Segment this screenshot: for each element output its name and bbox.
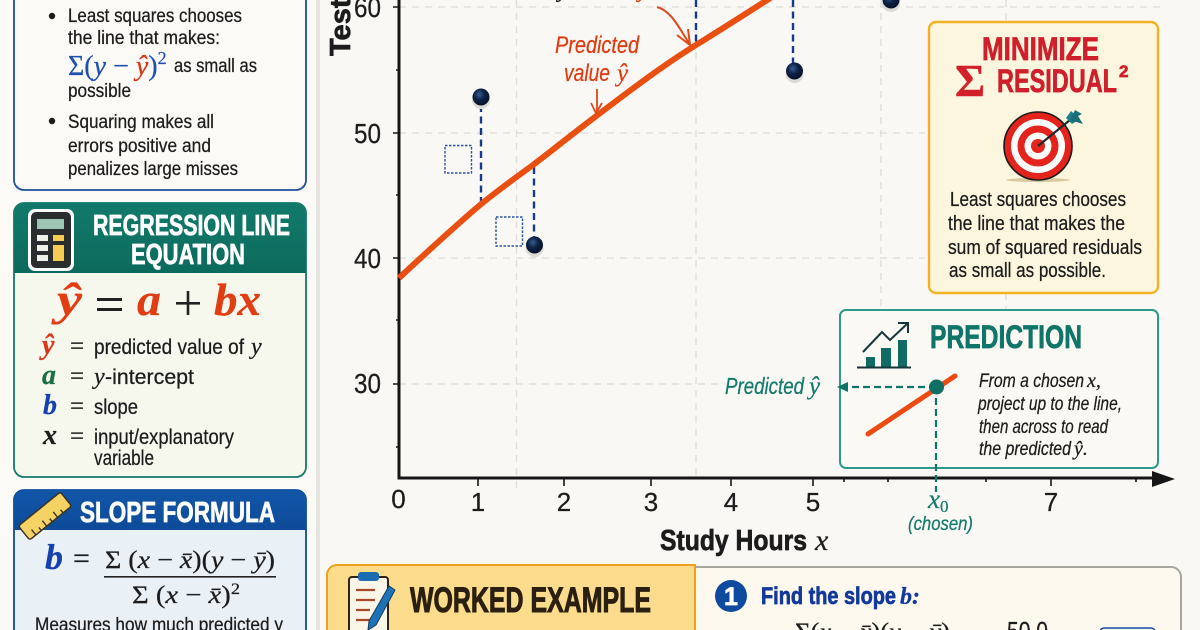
legend of symbols: predicted value of <box>94 336 244 359</box>
panel header <box>327 565 695 630</box>
heading: SLOPE FORMULA <box>80 497 275 529</box>
annotation: predicted value: ŷ <box>614 60 629 87</box>
text: Least squares chooses <box>950 189 1126 211</box>
x axis labels: 5 <box>806 487 820 517</box>
y axis labels: 30 <box>354 368 381 399</box>
y axis labels <box>354 0 381 399</box>
text: then across to read <box>979 417 1109 438</box>
heading: Σ <box>955 55 985 106</box>
text: ŷ. <box>1072 438 1088 460</box>
bullet: least squares chooses the line: 2 <box>158 48 167 68</box>
x0 label <box>908 484 973 535</box>
x axis labels: 4 <box>724 487 738 517</box>
panel: regression line equation <box>14 203 306 477</box>
heading: MINIMIZE <box>982 31 1099 67</box>
heading: RESIDUAL <box>997 63 1117 99</box>
legend of symbols: y <box>249 334 262 360</box>
legend of symbols: slope <box>94 396 138 419</box>
text: the predicted <box>979 439 1072 460</box>
predicted label: Predicted <box>725 373 805 399</box>
step 1: b: <box>900 584 920 610</box>
heading <box>955 31 1128 106</box>
annotation: arrow to line <box>556 0 690 45</box>
residual squares <box>445 146 522 246</box>
bullet: squaring: Squaring makes all <box>68 112 214 133</box>
legend of symbols: variable <box>94 447 154 470</box>
formula: 2 <box>231 581 240 598</box>
heading <box>93 210 290 271</box>
text <box>977 370 1122 460</box>
y axis labels: 40 <box>354 243 381 274</box>
equation <box>51 274 261 325</box>
legend of symbols: y <box>92 364 105 390</box>
formula: = <box>73 542 90 575</box>
text: sum of squared residuals <box>948 237 1142 259</box>
bullet: least squares chooses the line: possible <box>68 81 131 102</box>
panel: slope formula <box>14 490 306 630</box>
step 1 <box>715 580 920 612</box>
x axis labels: 1 <box>471 487 485 517</box>
bullet: least squares chooses the line: Least squares chooses <box>68 6 242 27</box>
heading: 2 <box>1119 62 1128 81</box>
annotation: predicted value: Predicted <box>555 32 640 59</box>
text: From a chosen <box>979 371 1084 392</box>
step 1: Find the slope <box>761 583 896 610</box>
chart: scatter plot with regression line <box>325 0 1175 557</box>
bullet: squaring: penalizes large misses <box>68 159 238 180</box>
legend of symbols: -intercept <box>105 366 194 389</box>
regression line <box>399 0 775 278</box>
bullet: least squares chooses the line <box>49 6 257 102</box>
bullet: squaring: errors positive and <box>68 136 211 157</box>
x0 label: x <box>928 484 940 514</box>
formula: b <box>45 537 63 577</box>
legend of symbols: input/explanatory <box>94 426 234 449</box>
x axis title: x <box>814 524 829 557</box>
predicted label: ŷ <box>806 373 821 400</box>
prediction projection <box>725 373 973 535</box>
legend of symbols <box>39 330 262 470</box>
formula: Σ (x − x̄) <box>132 582 230 609</box>
bullet: least squares chooses the line: as small as <box>174 56 257 77</box>
equation: ŷ <box>51 274 83 325</box>
data points <box>472 0 900 257</box>
panel header <box>14 490 306 530</box>
legend of symbols: b <box>43 390 57 421</box>
panel header <box>14 203 306 273</box>
text: project up to the line, <box>977 394 1122 415</box>
step 1: 1 <box>724 583 738 611</box>
step 1 formula <box>795 616 1155 630</box>
panel: least squares idea <box>14 0 306 190</box>
equation: bx <box>214 274 261 325</box>
legend of symbols: ŷ <box>39 330 55 361</box>
panel: minimize residual squared <box>929 22 1158 293</box>
heading: EQUATION <box>131 239 245 271</box>
icon: bar chart with rising arrow <box>857 323 911 368</box>
text: x, <box>1086 370 1101 392</box>
heading: REGRESSION LINE <box>93 210 290 242</box>
text: as small as possible. <box>949 260 1106 282</box>
x axis title: Study Hours <box>660 525 807 557</box>
legend of symbols: a <box>42 360 56 391</box>
x axis labels: 3 <box>644 487 658 517</box>
heading: PREDICTION <box>930 319 1082 355</box>
annotation: predicted value: value <box>564 60 610 87</box>
annotation: predicted value <box>555 32 640 113</box>
bullet: least squares chooses the line: the line that makes: <box>68 28 220 49</box>
icon: target with arrow <box>1004 110 1083 182</box>
legend of symbols: = <box>70 363 84 390</box>
text: the line that makes the <box>948 213 1125 235</box>
x0 label: 0 <box>940 497 948 516</box>
icon: ruler <box>18 492 72 540</box>
x axis labels: 0 <box>391 484 406 514</box>
x0 label: (chosen) <box>908 514 973 535</box>
legend of symbols: = <box>70 333 84 360</box>
y axis labels: 50 <box>354 118 381 149</box>
legend of symbols: = <box>70 423 84 450</box>
x axis labels: 7 <box>1044 487 1058 517</box>
panel: prediction <box>840 310 1158 468</box>
icon: clipboard and pencil <box>349 572 395 630</box>
legend of symbols: x <box>42 420 57 451</box>
bullet: least squares chooses the line: Σ(y − ŷ) <box>68 51 158 82</box>
heading: WORKED EXAMPLE <box>410 581 651 620</box>
panel: worked example <box>327 565 1181 630</box>
axes <box>393 0 1175 487</box>
bullet: squaring <box>49 112 238 180</box>
x axis labels: 2 <box>557 487 571 517</box>
text <box>948 189 1142 282</box>
x axis labels <box>391 484 1058 517</box>
legend of symbols: = <box>70 393 84 420</box>
formula: Σ (x − x̄)(y − ȳ) <box>105 547 275 574</box>
equation: a <box>137 274 161 325</box>
residual lines <box>481 0 793 238</box>
mini line <box>868 376 955 434</box>
icon: calculator <box>28 209 74 271</box>
formula <box>45 537 276 609</box>
